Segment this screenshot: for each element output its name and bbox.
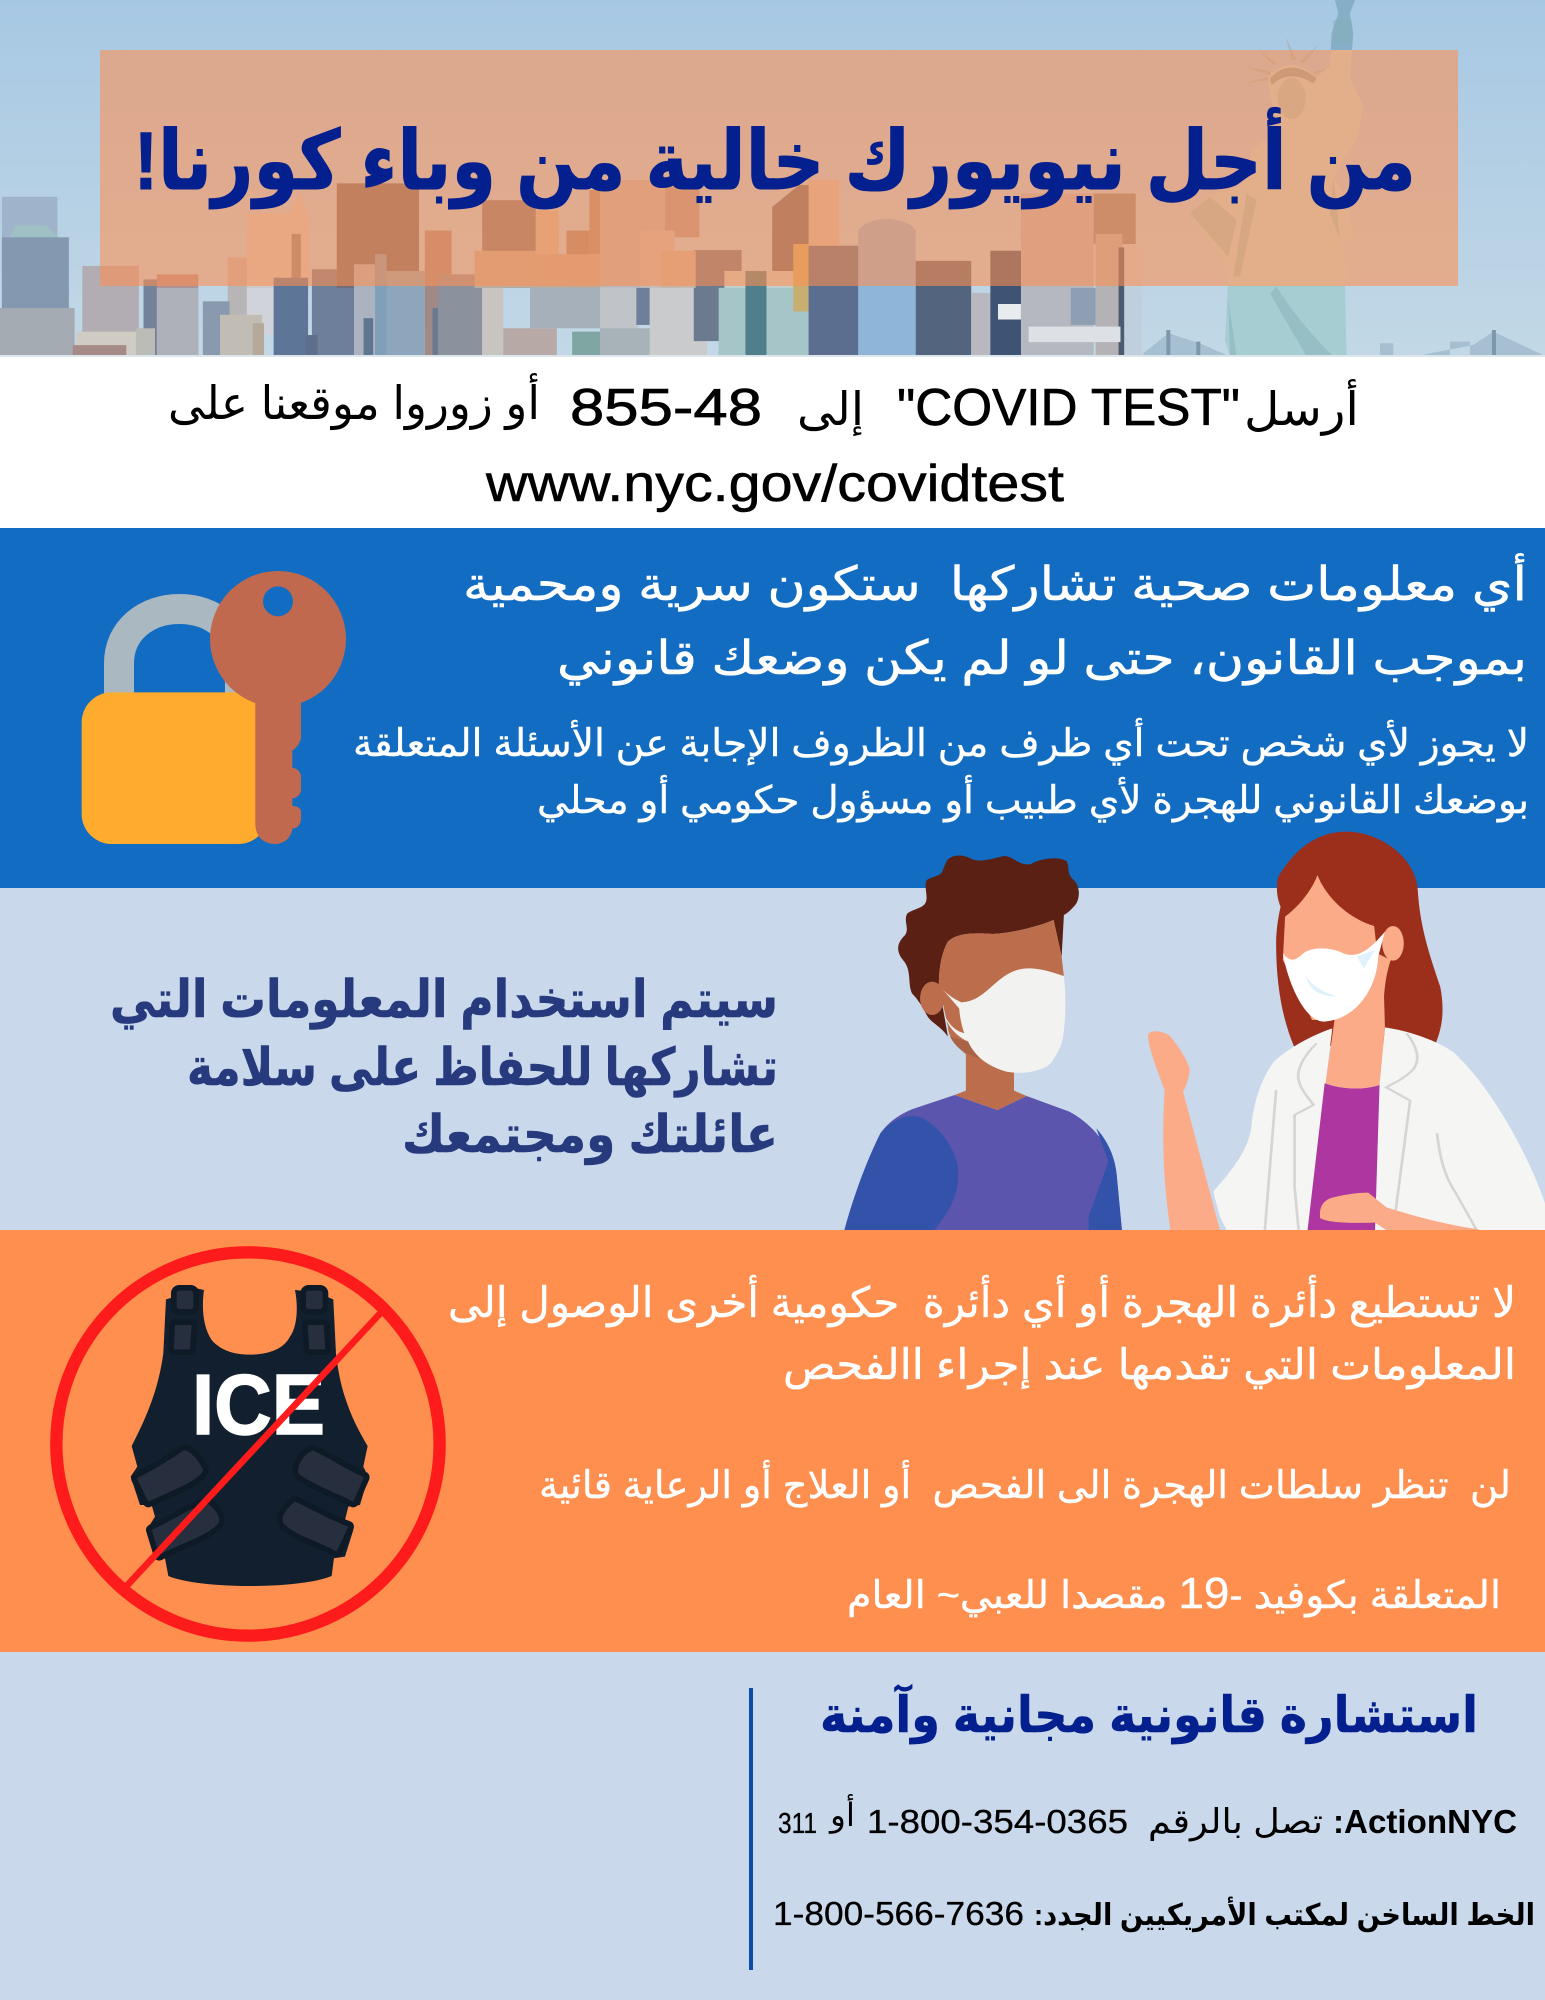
panel: privacy: بموجب القانون، حتى لو لم يكن وضعك قانوني [557,631,1527,686]
panel: text instructions: www.nyc.gov/covidtest [485,455,1065,513]
illustration: woman doctor [1148,832,1545,1230]
panel: legal help: استشارة قانونية مجانية وآمنة [820,1684,1478,1745]
statue of liberty [1143,0,1545,357]
banner: skyline [0,0,1545,359]
panel: legal help: أو [828,1794,855,1834]
panel: data use: سيتم استخدام المعلومات التي [110,971,778,1030]
orange title panel [100,50,1458,286]
panel: data use: تشاركها للحفاظ على سلامة [187,1039,778,1098]
ICE label: ICE [192,1358,325,1453]
panel: legal help: 1-800-354-0365 [867,1803,1128,1840]
panel: legal help: :ActionNYC [1333,1803,1517,1840]
panel: text instructions: 855-48 [570,379,762,437]
skyline right half [600,180,1142,359]
panel: legal help: تصل بالرقم [1148,1803,1323,1842]
panel: privacy [0,528,1545,888]
icon: padlock and key [82,571,346,844]
illustration: man with mask [844,856,1122,1230]
panel: legal help: 311 [778,1808,817,1840]
panel: immigration notice: المعلومات التي تقدمها عند إجراء االفحص [783,1341,1516,1390]
panel: text instructions: "COVID TEST" [897,379,1240,437]
panel: legal help: 1-800-566-7636 [773,1895,1024,1932]
panel: text instructions: إلى [797,383,864,436]
prohibition sign [56,1252,440,1636]
panel: immigration notice: لن تنظر سلطات الهجرة الى الفحص أو العلاج أو الرعاية قائية [539,1460,1511,1508]
panel: legal help [0,1652,1545,2000]
panel: text instructions: أو زوروا موقعنا على [168,373,540,431]
skyline left half [0,183,601,359]
panel: privacy: لا يجوز لأي شخص تحت أي ظرف من الظروف الإجابة عن الأسئلة المتعلقة [353,718,1529,766]
panel: data use: عائلتك ومجتمعك [402,1106,778,1165]
panel: privacy: بوضعك القانوني للهجرة لأي طبيب أو مسؤول حكومي أو محلي [537,775,1529,823]
panel: immigration notice: المتعلقة بكوفيد -19 مقصدا للعبي~ العام [847,1569,1501,1618]
panel: immigration notice: لا تستطيع دأئرة الهجرة أو أي دأئرة حكومية أخرى الوصول إلى [448,1275,1516,1328]
panel: immigration notice [0,1230,1545,1652]
panel: data use [0,888,1545,1230]
panel: text instructions [0,357,1545,528]
panel: text instructions: أرسل [1244,379,1359,436]
panel: privacy: أي معلومات صحية تشاركها ستكون سرية ومحمية [463,553,1527,612]
icon: ICE vest prohibited [56,1252,440,1636]
vest [131,1288,368,1586]
